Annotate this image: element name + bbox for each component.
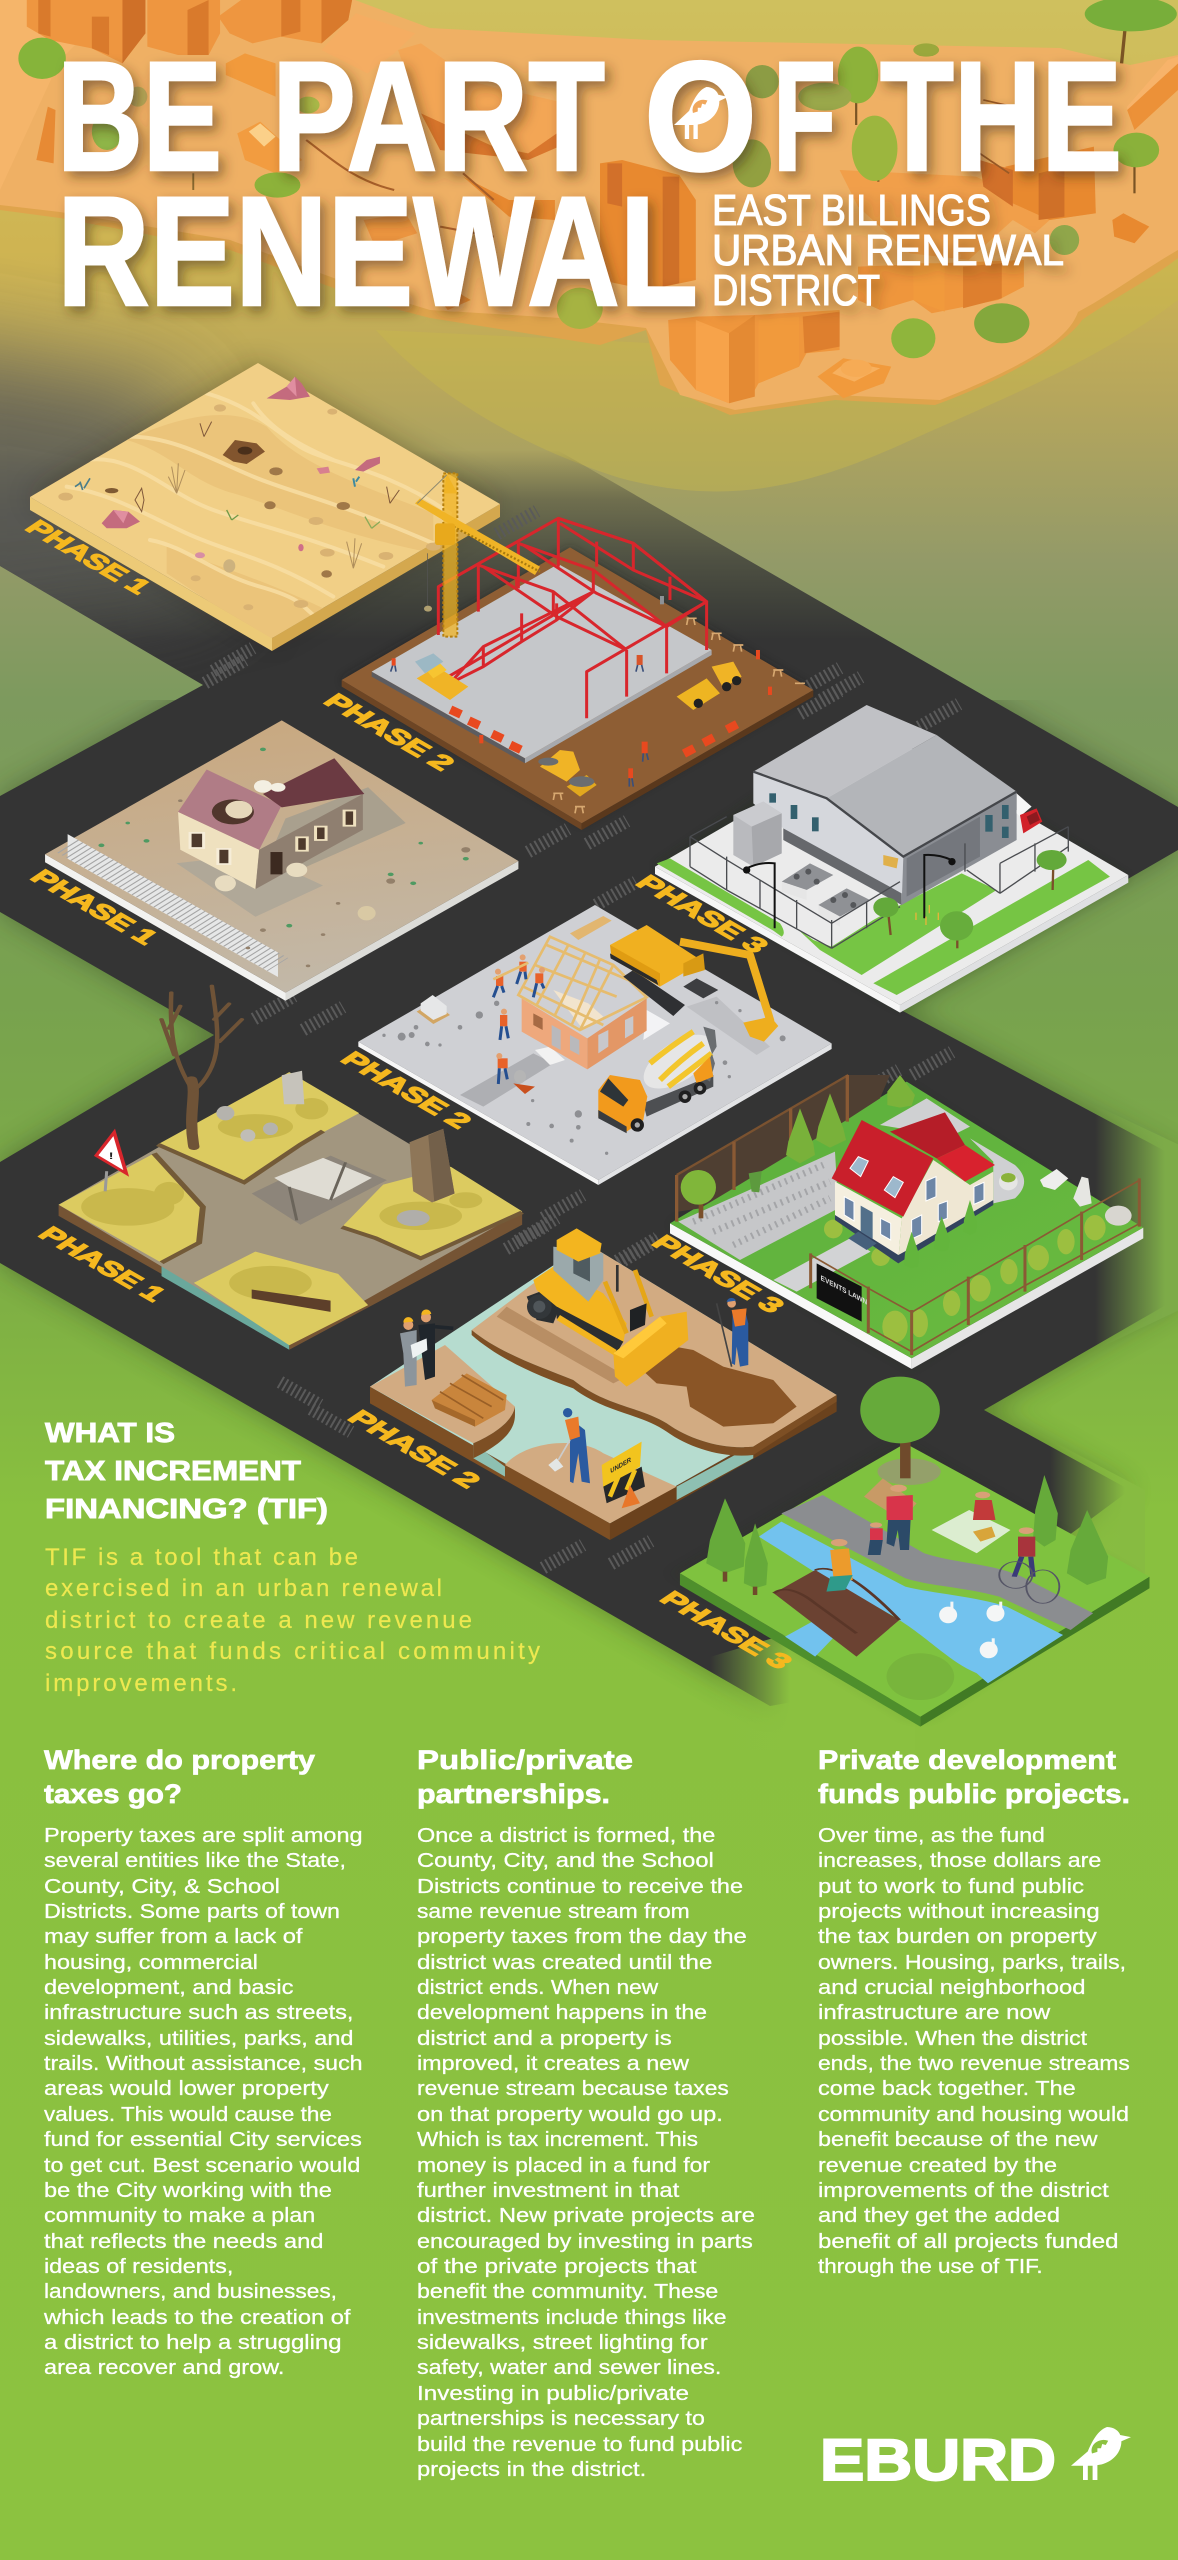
logo: EBURD wordmark with bird: EBURD bbox=[820, 2428, 1056, 2493]
ruined house bbox=[178, 758, 376, 920]
phase label: steel frame: PHASE 2 bbox=[317, 689, 461, 775]
subtitle: East Billings Urban Renewal District: EAST BILLINGS bbox=[712, 186, 991, 235]
heading: private development funds public projects bbox=[818, 1745, 1130, 1809]
text block: where do property taxes go: several entities like the State, bbox=[44, 1849, 346, 1872]
white picket fence bbox=[68, 834, 278, 977]
tower crane bbox=[415, 473, 540, 700]
warehouse building bbox=[733, 705, 1042, 927]
text block: private development funds public projects: and they get the added bbox=[818, 2204, 1060, 2227]
under construction barrier: UNDER bbox=[610, 1456, 632, 1475]
heading: what is tax increment financing: WHAT IS bbox=[45, 1417, 175, 1448]
title: BE bbox=[57, 30, 222, 204]
text block: public private partnerships: build the revenue to fund public bbox=[417, 2433, 742, 2456]
heading: public private partnerships: partnerships. bbox=[417, 1779, 610, 1809]
text block: public private partnerships: safety, water and sewer lines. bbox=[417, 2356, 721, 2379]
river bbox=[759, 1522, 1063, 1683]
phase label: house framing: PHASE 2 bbox=[334, 1047, 478, 1133]
text block: private development funds public projects: projects without increasing bbox=[818, 1900, 1100, 1923]
heading: what is tax increment financing bbox=[45, 1417, 328, 1524]
front fence and sign bbox=[811, 1178, 1140, 1355]
security fence bbox=[690, 817, 1068, 948]
concrete slab bbox=[372, 564, 712, 763]
title: O bbox=[644, 30, 757, 204]
text block: TIF definition bbox=[45, 1544, 540, 1697]
timber stack bbox=[432, 1373, 507, 1427]
footbridge bbox=[774, 1569, 899, 1657]
workers bbox=[493, 954, 545, 1094]
grader and roller bbox=[538, 662, 742, 797]
text block: public private partnerships: projects in the district. bbox=[417, 2458, 646, 2481]
panel: row 1 phase 1 desert lot bbox=[30, 363, 500, 651]
trees bbox=[733, 0, 1177, 358]
heading: public private partnerships: Public/private bbox=[417, 1745, 633, 1775]
text block: public private partnerships: encouraged by investing in parts bbox=[417, 2230, 753, 2253]
cliffs centre and right bbox=[600, 57, 1178, 403]
yellow grass patches bbox=[59, 1072, 522, 1345]
heading: where do property taxes go bbox=[44, 1745, 315, 1809]
park trees bbox=[706, 1377, 1108, 1700]
logo: EBURD wordmark with bird bbox=[820, 2427, 1131, 2493]
text block: private development funds public projects bbox=[818, 1824, 1130, 2278]
panel: row 3 phase 2 bulldozer site bbox=[370, 1228, 837, 1540]
heading: what is tax increment financing: TAX INCREMENT bbox=[45, 1455, 301, 1486]
text block: where do property taxes go: Property taxes are split among bbox=[44, 1824, 363, 1847]
text block: private development funds public projects: possible. When the district bbox=[818, 2027, 1087, 2050]
text block: private development funds public projects: improvements of the district bbox=[818, 2179, 1109, 2202]
text block: public private partnerships: sidewalks, street lighting for bbox=[417, 2331, 708, 2354]
text block: where do property taxes go: may suffer from a lack of bbox=[44, 1925, 303, 1948]
text block: TIF definition: improvements. bbox=[45, 1670, 237, 1697]
text block: private development funds public projects: ends, the two revenue streams bbox=[818, 2052, 1130, 2075]
text block: private development funds public projects: through the use of TIF. bbox=[818, 2255, 1043, 2278]
text block: where do property taxes go: ideas of residents, bbox=[44, 2255, 233, 2278]
two site managers bbox=[400, 1309, 453, 1387]
barriers and workers bbox=[392, 596, 772, 778]
text block: private development funds public projects: increases, those dollars are bbox=[818, 1849, 1101, 1872]
text block: public private partnerships: Districts continue to receive the bbox=[417, 1875, 743, 1898]
subtitle: East Billings Urban Renewal District: URBAN RENEWAL bbox=[712, 226, 1064, 275]
trees bbox=[873, 850, 1067, 948]
grass clumps bbox=[81, 1098, 482, 1300]
text block: where do property taxes go: infrastructure such as streets, bbox=[44, 2001, 354, 2024]
cliffs top left bbox=[27, 0, 566, 310]
text block: where do property taxes go: area recover and grow. bbox=[44, 2356, 284, 2379]
text block: TIF definition: TIF is a tool that can be bbox=[45, 1544, 358, 1571]
heading: where do property taxes go: taxes go? bbox=[44, 1779, 182, 1809]
text block: public private partnerships: district ends. When new bbox=[417, 1976, 658, 1999]
text block: where do property taxes go: community to make a plan bbox=[44, 2204, 315, 2227]
text block: where do property taxes go: trails. Without assistance, such bbox=[44, 2052, 363, 2075]
fallen log bbox=[252, 1290, 331, 1312]
text block: private development funds public projects: come back together. The bbox=[818, 2077, 1076, 2100]
text block: where do property taxes go: values. This would cause the bbox=[44, 2103, 332, 2126]
title: RENEWAL bbox=[57, 165, 698, 339]
abandoned car bbox=[252, 1156, 387, 1225]
title: PART bbox=[272, 30, 605, 204]
soil islands bbox=[370, 1243, 837, 1523]
road network bbox=[0, 240, 1178, 1750]
text block: private development funds public projects: put to work to fund public bbox=[818, 1875, 1084, 1898]
text block: public private partnerships: of the private projects that bbox=[417, 2255, 697, 2278]
text block: public private partnerships: district and a property is bbox=[417, 2027, 672, 2050]
worker digging bbox=[548, 1408, 590, 1483]
text block: where do property taxes go: which leads to the creation of bbox=[43, 2306, 351, 2329]
text block: where do property taxes go: development, and basic bbox=[44, 1976, 293, 1999]
text block: public private partnerships: money is placed in a fund for bbox=[417, 2154, 710, 2177]
heading: public private partnerships bbox=[417, 1745, 633, 1809]
excavator bbox=[610, 925, 778, 1042]
title bbox=[57, 30, 1122, 339]
text block: private development funds public projects: benefit because of the new bbox=[818, 2128, 1098, 2151]
crosswalk markings bbox=[205, 511, 959, 1568]
icon: bird inside the O of title bbox=[674, 87, 728, 139]
text block: where do property taxes go: sidewalks, utilities, parks, and bbox=[44, 2027, 354, 2050]
text block: where do property taxes go: landowners, and businesses, bbox=[44, 2280, 337, 2303]
front fence and sign: EVENTS LAWN bbox=[821, 1273, 867, 1307]
subtitle: East Billings Urban Renewal District: DISTRICT bbox=[712, 266, 880, 315]
landscape: orange plateau with cliffs and trees bbox=[0, 0, 1178, 491]
text block: TIF definition: exercised in an urban renewal bbox=[45, 1575, 442, 1602]
phase label: park: PHASE 3 bbox=[653, 1587, 799, 1673]
pallet bbox=[417, 995, 450, 1024]
text block: private development funds public projects: revenue created by the bbox=[818, 2154, 1057, 2177]
text block: public private partnerships: property taxes from the day the bbox=[417, 1925, 747, 1948]
teal front sides bbox=[473, 1443, 505, 1477]
text block: where do property taxes go: areas would lower property bbox=[44, 2077, 330, 2100]
house shadow bbox=[255, 787, 406, 889]
panel: row 2 phase 1 ruined house bbox=[45, 720, 518, 1001]
heading: what is tax increment financing: FINANCING? (TIF) bbox=[45, 1493, 328, 1524]
text block: private development funds public projects: Over time, as the fund bbox=[818, 1824, 1045, 1847]
bench, family, picnic and cyclist bbox=[826, 1478, 1059, 1603]
text block: public private partnerships: on that property would go up. bbox=[417, 2103, 723, 2126]
stone paving bbox=[678, 1098, 1024, 1292]
panel: row 3 phase 3 park bbox=[680, 1377, 1149, 1727]
warning sign: ! bbox=[109, 1151, 114, 1161]
phase label: warehouse: PHASE 3 bbox=[629, 871, 775, 957]
text block: public private partnerships: district. New private projects are bbox=[417, 2204, 755, 2227]
text block: where do property taxes go: County, City, & School bbox=[44, 1875, 280, 1898]
heading: where do property taxes go: Where do property bbox=[44, 1745, 315, 1775]
rubble bbox=[382, 1001, 786, 1155]
text block: where do property taxes go: housing, commercial bbox=[44, 1951, 258, 1974]
text block: private development funds public projects: the tax burden on property bbox=[818, 1925, 1098, 1948]
cement mixer truck bbox=[598, 1024, 722, 1133]
text block: TIF definition: source that funds critical community bbox=[45, 1638, 540, 1665]
text block: public private partnerships: Investing in public/private bbox=[417, 2382, 689, 2405]
text block: public private partnerships: Which is tax increment. This bbox=[417, 2128, 698, 2151]
title: F bbox=[773, 30, 836, 204]
text block: private development funds public projects: infrastructure are now bbox=[818, 2001, 1050, 2024]
AC tower and units bbox=[733, 802, 782, 867]
text block: public private partnerships: investments include things like bbox=[417, 2306, 726, 2329]
text block: where do property taxes go: Districts. Some parts of town bbox=[44, 1900, 340, 1923]
text block: public private partnerships: Once a district is formed, the bbox=[417, 1824, 715, 1847]
text block: where do property taxes go: that reflects the needs and bbox=[44, 2230, 324, 2253]
trees and shrubs bbox=[681, 1075, 1132, 1343]
text block: private development funds public projects: community and housing would bbox=[818, 2103, 1129, 2126]
red roof house bbox=[832, 1112, 995, 1268]
panel: row 3 phase 1 wasteland bbox=[59, 986, 522, 1350]
text block: where do property taxes go: to get cut. Best scenario would bbox=[44, 2154, 360, 2177]
wooden fence rear bbox=[677, 1075, 890, 1222]
panel: row 3 phase 3 house with garden bbox=[670, 1075, 1143, 1369]
text block: where do property taxes go: fund for essential City services bbox=[44, 2128, 362, 2151]
bulldozer bbox=[527, 1228, 688, 1387]
panel: row 2 phase 3 warehouse with lawn bbox=[655, 705, 1128, 1013]
text block: where do property taxes go bbox=[43, 1824, 363, 2379]
dry plants bbox=[75, 422, 399, 568]
text block: where do property taxes go: be the City working with the bbox=[44, 2179, 332, 2202]
text block: public private partnerships bbox=[417, 1824, 755, 2481]
text block: public private partnerships: further investment in that bbox=[417, 2179, 680, 2202]
standing rock bbox=[216, 1071, 455, 1226]
text block: where do property taxes go: a district to help a struggling bbox=[44, 2331, 342, 2354]
panel: row 1 phase 2 steel frame construction bbox=[342, 473, 813, 830]
text block: public private partnerships: County, City, and the School bbox=[417, 1849, 714, 1872]
text block: public private partnerships: development happens in the bbox=[417, 2001, 707, 2024]
text block: public private partnerships: partnerships is necessary to bbox=[417, 2407, 705, 2430]
plateau ground bbox=[0, 0, 1178, 491]
subtitle: East Billings Urban Renewal District bbox=[712, 186, 1064, 315]
text block: private development funds public projects: owners. Housing, parks, trails, bbox=[818, 1951, 1126, 1974]
heading: private development funds public projects: funds public projects. bbox=[818, 1779, 1130, 1809]
brick house with timber roof bbox=[518, 916, 647, 1069]
phase label: desert: PHASE 1 bbox=[19, 516, 158, 598]
lawn bbox=[657, 858, 1110, 995]
walking path bbox=[781, 1495, 1093, 1630]
under construction barrier bbox=[602, 1442, 645, 1508]
dirt pile bbox=[635, 1343, 797, 1427]
text block: public private partnerships: revenue stream because taxes bbox=[417, 2077, 729, 2100]
phase label: red roof house: PHASE 3 bbox=[645, 1231, 791, 1317]
phase label: wasteland: PHASE 1 bbox=[32, 1222, 173, 1306]
heading: private development funds public projects: Private development bbox=[818, 1745, 1116, 1775]
panel: row 2 phase 2 house framing site bbox=[358, 905, 832, 1185]
text block: public private partnerships: same revenue stream from bbox=[417, 1900, 690, 1923]
text block: public private partnerships: district was created until the bbox=[417, 1951, 712, 1974]
rocks bbox=[102, 377, 380, 578]
bare dead tree bbox=[162, 986, 242, 1147]
warning sign bbox=[96, 1132, 126, 1191]
worker shoveling bbox=[717, 1298, 748, 1367]
phase label: bulldozer: PHASE 2 bbox=[341, 1406, 487, 1492]
text block: private development funds public projects: and crucial neighborhood bbox=[818, 1976, 1086, 1999]
swans bbox=[939, 1602, 1004, 1658]
text block: TIF definition: district to create a new revenue bbox=[45, 1607, 472, 1634]
text block: private development funds public projects: benefit of all projects funded bbox=[818, 2230, 1118, 2253]
text block: public private partnerships: improved, it creates a new bbox=[417, 2052, 689, 2075]
phase label: ruined house: PHASE 1 bbox=[24, 865, 165, 949]
red steel frame bbox=[438, 518, 707, 718]
text block: public private partnerships: benefit the community. These bbox=[417, 2280, 718, 2303]
